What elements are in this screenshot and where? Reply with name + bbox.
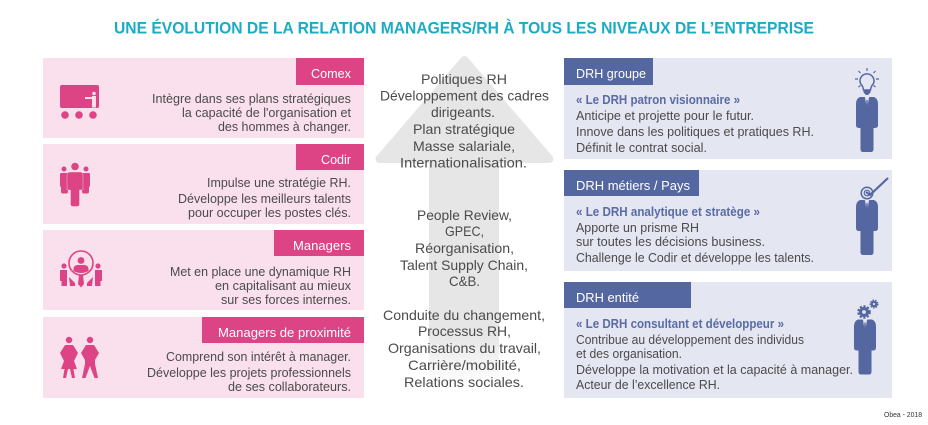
text: DRH métiers description: sur toutes les décisions business. [576, 234, 765, 249]
text: top level policies: dirigeants. [431, 104, 495, 120]
icon: manager with light bulb [855, 68, 879, 152]
text: DRH métiers description: Challenge le Codir et développe les talents. [576, 250, 814, 265]
text: Managers description: Met en place une dynamique RH [170, 264, 351, 279]
icon: presentation board [60, 85, 99, 119]
icon: woman and man [60, 337, 99, 378]
icon: team of three [60, 163, 90, 206]
panel: Managers de proximité [43, 317, 364, 398]
tab: DRH groupe [564, 58, 653, 85]
text: top level policies: Plan stratégique [413, 121, 515, 137]
text: Comex description: des hommes à changer. [218, 119, 351, 134]
text: DRH entité description: Développe la motivation et la capacité à manager. [576, 362, 853, 377]
text: Managers description: en capitalisant au mieux [215, 278, 351, 293]
text: top level policies: Masse salariale, [413, 138, 515, 154]
panel: Codir [43, 144, 364, 224]
text: Managers de proximité description: de ses collaborateurs. [228, 379, 351, 394]
arrow: upward grey [380, 60, 550, 385]
text: top level policies [380, 71, 549, 170]
panel: Managers [43, 230, 364, 310]
tab: DRH entité [564, 282, 691, 308]
icon: magnified manager among team [60, 251, 102, 288]
text: DRH métiers description [576, 205, 814, 265]
panel: Comex [43, 58, 364, 138]
text: Codir description [178, 175, 351, 220]
tab: Codir [296, 144, 364, 170]
text: middle level topics: Réorganisation, [415, 240, 514, 256]
title: UNE ÉVOLUTION DE LA RELATION MANAGERS/RH À TOUS LES NIVEAUX DE L’ENTREPRISE [114, 18, 814, 38]
panel: DRH entité [564, 282, 892, 398]
text: Managers de proximité description: Comprend son intérêt à manager. [166, 349, 351, 364]
source credit: Obea - 2018 [884, 412, 922, 419]
text: Managers de proximité description: Développe les projets professionnels [147, 365, 351, 380]
text: local level topics: Carrière/mobilité, [408, 357, 521, 373]
tab: Managers: Managers [293, 238, 351, 253]
text: middle level topics: Talent Supply Chain, [400, 257, 528, 273]
text: DRH groupe description: « Le DRH patron visionnaire » [576, 93, 740, 107]
text: top level policies: Développement des cadres [380, 88, 549, 104]
text: local level topics: Processus RH, [418, 323, 511, 339]
text: Codir description: Impulse une stratégie RH. [207, 175, 351, 190]
text: local level topics [383, 307, 545, 390]
text: Comex description [152, 91, 351, 134]
text: Codir description: Développe les meilleurs talents [178, 191, 351, 206]
text: Managers description: sur ses forces internes. [221, 292, 351, 307]
panel: DRH groupe [564, 58, 892, 159]
text: DRH groupe description: Innove dans les politiques et pratiques RH. [576, 124, 814, 139]
text: Codir description: pour occuper les postes clés. [188, 205, 351, 220]
panel: DRH métiers / Pays [564, 170, 892, 271]
text: DRH entité description: « Le DRH consultant et développeur » [576, 317, 784, 331]
tab: Comex [296, 58, 364, 85]
text: middle level topics: GPEC, [445, 223, 484, 239]
text: DRH groupe description: Définit le contrat social. [576, 140, 707, 155]
text: middle level topics: C&B. [449, 273, 480, 289]
text: DRH métiers description: Apporte un prisme RH [576, 220, 699, 235]
text: Managers description [170, 264, 351, 307]
tab: DRH métiers / Pays: DRH métiers / Pays [576, 178, 690, 193]
tab: Managers de proximité [202, 317, 364, 343]
text: local level topics: Conduite du changement, [383, 307, 545, 323]
text: Comex description: la capacité de l'organisation et [182, 105, 351, 120]
icon: manager with target check [856, 178, 888, 255]
text: middle level topics: People Review, [417, 207, 512, 223]
tab: Codir: Codir [321, 152, 352, 167]
text: DRH entité description: Acteur de l’excellence RH. [576, 377, 720, 392]
text: DRH groupe description: Anticipe et projette pour le futur. [576, 108, 754, 123]
text: DRH métiers description: « Le DRH analytique et stratège » [576, 205, 760, 219]
tab: DRH groupe: DRH groupe [576, 66, 646, 81]
text: DRH groupe description [576, 93, 814, 155]
tab: Managers [274, 230, 364, 256]
text: top level policies: Politiques RH [421, 71, 507, 87]
text: DRH entité description: Contribue au développement des individus [576, 332, 804, 347]
icon: manager with gears [854, 300, 878, 374]
tab: Managers de proximité: Managers de proximité [218, 325, 351, 340]
text: DRH entité description [576, 317, 853, 392]
text: Managers de proximité description [147, 349, 351, 394]
tab: Comex: Comex [311, 66, 351, 81]
tab: DRH métiers / Pays [564, 170, 699, 196]
text: local level topics: Organisations du travail, [388, 340, 541, 356]
text: Comex description: Intègre dans ses plans stratégiques [152, 91, 351, 106]
text: DRH entité description: et des organisation. [576, 346, 682, 361]
text: local level topics: Relations sociales. [404, 374, 524, 390]
text: middle level topics [400, 207, 528, 289]
tab: DRH entité: DRH entité [576, 290, 639, 305]
text: top level policies: Internationalisation. [400, 154, 527, 170]
